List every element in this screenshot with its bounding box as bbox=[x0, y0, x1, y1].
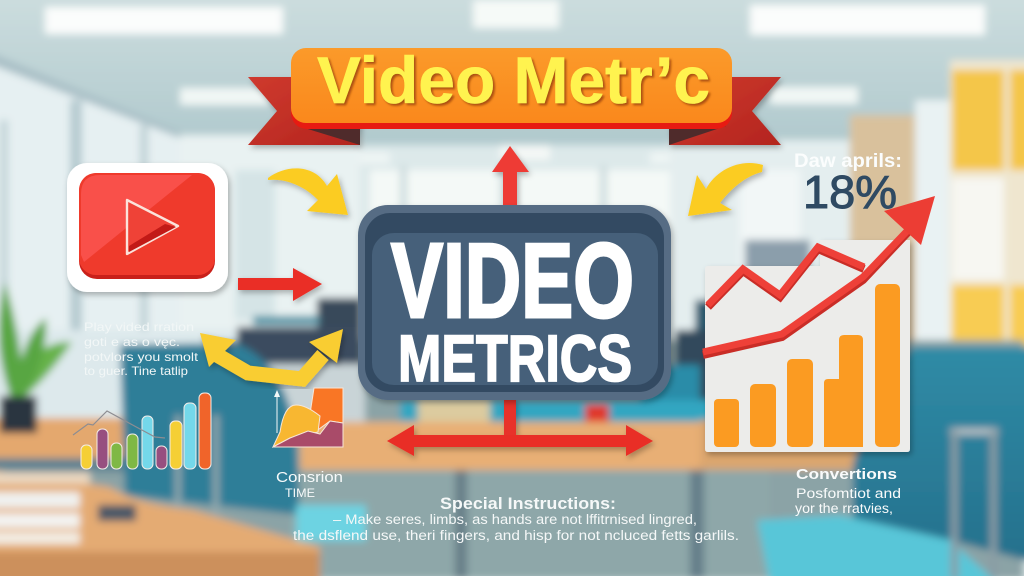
chart panel bbox=[705, 240, 910, 452]
arrow: curved yellow top-right bbox=[688, 163, 763, 216]
ribbon tail left bbox=[248, 77, 360, 145]
text block: play video note: Play vided rration bbox=[84, 320, 194, 334]
stat: daily percentage: 18% bbox=[803, 166, 897, 218]
chart: conversions bar chart bbox=[703, 196, 935, 452]
banner: Video Metr'c title ribbon bbox=[248, 43, 781, 145]
chart: colourful bars with line bbox=[73, 393, 211, 469]
arrow: red stem and double-headed horizontal bbox=[387, 398, 653, 456]
red button bbox=[79, 173, 215, 279]
arrow: yellow double-headed V bbox=[200, 329, 343, 379]
label: conversion time: TIME bbox=[285, 486, 315, 500]
ribbon fold left bbox=[298, 126, 360, 145]
label: conversion time bbox=[276, 470, 343, 500]
play triangle bbox=[127, 200, 178, 254]
label: conversion time: Consrion bbox=[276, 470, 343, 486]
arrow head bbox=[884, 196, 935, 245]
text block: play video note: potvlors you smolt bbox=[84, 350, 199, 364]
banner plate bbox=[291, 52, 732, 129]
icon: video play button bbox=[67, 163, 228, 292]
label: conversions: Posfomtiot and bbox=[796, 486, 901, 501]
chart: conversion time area chart bbox=[273, 388, 343, 447]
trend arrows bbox=[703, 230, 910, 355]
text block: play video note bbox=[84, 320, 199, 378]
arrow: up to banner bbox=[492, 146, 529, 206]
ribbon fold right bbox=[669, 126, 726, 145]
text block: play video note: to guer. Tine tatlip bbox=[84, 364, 188, 378]
heading METRICS: METRICS bbox=[398, 321, 632, 395]
label: conversions: Convertions bbox=[796, 466, 897, 483]
label: conversions: yor the rratvies, bbox=[795, 501, 893, 516]
ribbon tail right bbox=[669, 77, 781, 145]
arrow: curved yellow top-left bbox=[268, 168, 348, 215]
panel: central VIDEO METRICS sign bbox=[358, 205, 671, 400]
bars bbox=[714, 284, 900, 447]
stat: daily percentage: Daw aprils: bbox=[794, 151, 902, 172]
text block: special instructions bbox=[293, 494, 739, 543]
label: conversions bbox=[795, 466, 901, 516]
title: Video Metr’c bbox=[317, 43, 710, 117]
text block: special instructions: Special Instructions: bbox=[440, 494, 616, 513]
stat: daily percentage bbox=[794, 151, 902, 218]
arrow: red right bbox=[238, 268, 322, 301]
text block: play video note: goti e as o vęc. bbox=[84, 335, 180, 349]
heading VIDEO: VIDEO bbox=[391, 222, 634, 340]
text block: special instructions: – Make seres, limbs, as hands are not lffitrnised lingred, bbox=[333, 512, 697, 527]
text block: special instructions: the dsflend use, theri fingers, and hisp for not ncluced fetts garlils. bbox=[293, 528, 739, 543]
card bbox=[67, 163, 228, 292]
